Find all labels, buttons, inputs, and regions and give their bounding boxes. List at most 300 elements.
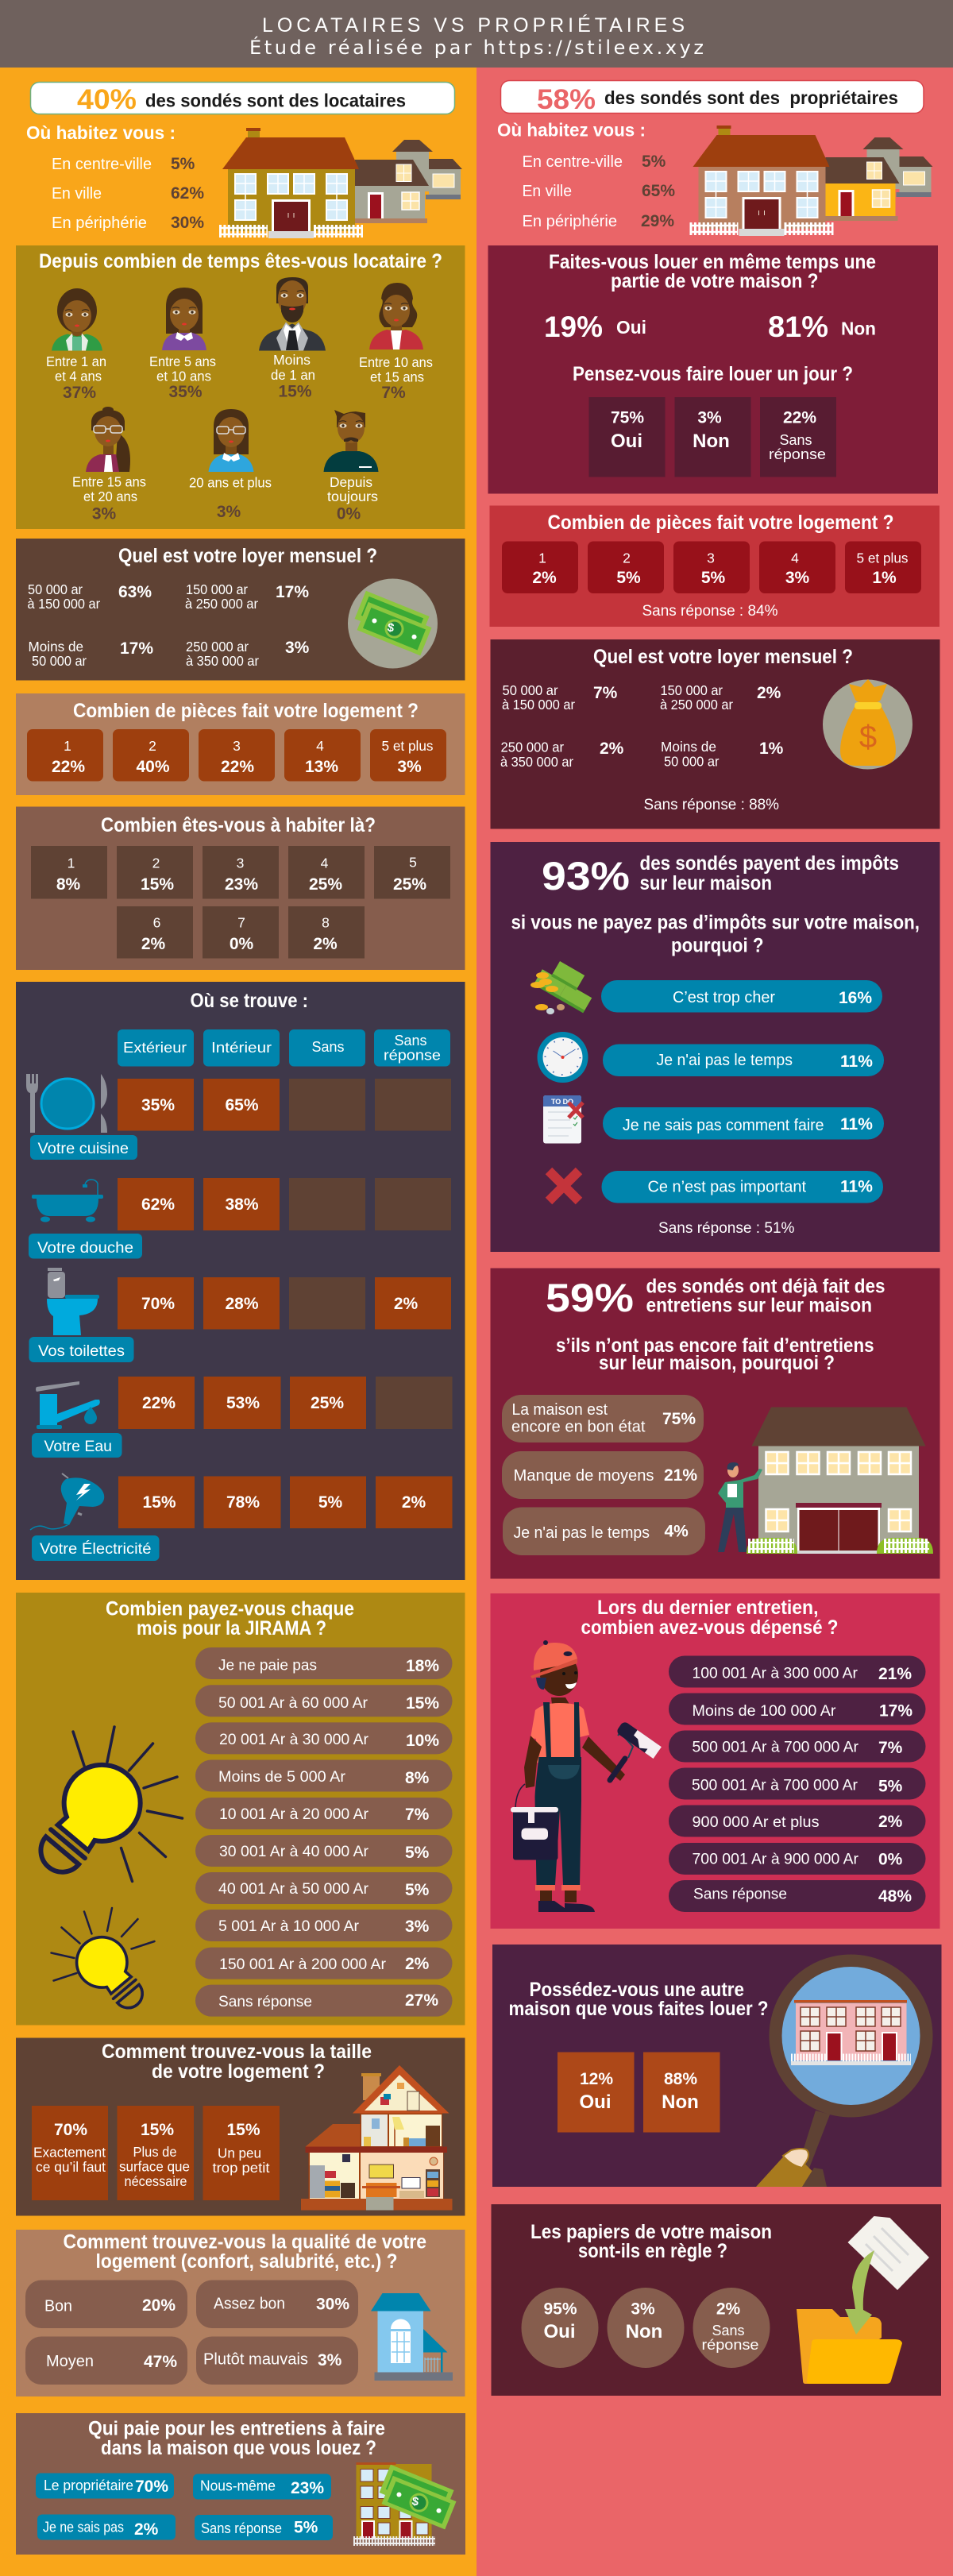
answer pills: 23% bbox=[291, 2479, 324, 2497]
answer boxes bbox=[558, 2053, 720, 2132]
icon: small light bulb bbox=[51, 1908, 156, 2021]
answer boxes: 88% bbox=[664, 2070, 697, 2088]
answer boxes: 15% bbox=[141, 2121, 174, 2139]
person: 10 to 15 years: et 15 ans bbox=[370, 369, 424, 384]
subheading bbox=[556, 1334, 874, 1374]
room boxes: 2 bbox=[149, 738, 156, 754]
subheading: pourquoi ? bbox=[671, 934, 764, 956]
row: shower bbox=[29, 1178, 451, 1258]
panel: last maintenance cost bbox=[491, 1593, 940, 1929]
location stats: En périphérie bbox=[523, 213, 617, 230]
person: 5 to 10 years: 35% bbox=[168, 383, 203, 401]
row: kitchen: 35% bbox=[141, 1096, 175, 1114]
list of amounts: 2% bbox=[878, 1813, 903, 1831]
reasons list: Ce n’est pas important bbox=[648, 1179, 806, 1196]
list of amounts: 10 001 Ar à 20 000 Ar bbox=[219, 1806, 369, 1823]
statistic 59% bbox=[546, 1276, 885, 1320]
icon: toilet bbox=[47, 1268, 99, 1335]
answer boxes bbox=[32, 2106, 280, 2200]
label: electricity: Votre Électricité bbox=[40, 1541, 151, 1558]
location stats: 30% bbox=[171, 214, 204, 232]
panel: who pays for repairs bbox=[16, 2413, 465, 2555]
rent stats: 50 000 ar bbox=[32, 653, 87, 669]
heading bbox=[64, 2230, 426, 2273]
icon: money bag bbox=[823, 679, 912, 769]
heading bbox=[531, 2221, 772, 2262]
location stats: En ville bbox=[52, 185, 102, 203]
room boxes: 5% bbox=[616, 569, 641, 587]
icon: folder with document bbox=[797, 2216, 929, 2384]
household boxes: 4 bbox=[321, 855, 329, 871]
room boxes: 22% bbox=[221, 758, 254, 776]
label: water: Votre Eau bbox=[44, 1439, 112, 1455]
panel: household size bbox=[16, 807, 465, 970]
list of amounts: 48% bbox=[878, 1887, 912, 1906]
answer boxes: 70% bbox=[54, 2121, 87, 2139]
row: toilets: 2% bbox=[394, 1295, 418, 1313]
answer boxes: Oui bbox=[580, 2091, 612, 2113]
answer bubbles: Non bbox=[626, 2321, 662, 2342]
icon: house with surveyor bbox=[718, 1408, 933, 1554]
reasons list: 75% bbox=[662, 1410, 696, 1428]
reasons list: 16% bbox=[839, 989, 872, 1007]
label: toilets: Vos toilettes bbox=[38, 1343, 125, 1360]
answer boxes: 3% bbox=[697, 408, 722, 427]
household boxes: 25% bbox=[393, 875, 426, 894]
label: shower: Votre douche bbox=[37, 1240, 133, 1257]
statistic 59%: 59% bbox=[546, 1276, 634, 1320]
household boxes: 15% bbox=[141, 875, 174, 894]
list of amounts: 15% bbox=[406, 1694, 439, 1713]
reasons list: encore en bon état bbox=[511, 1419, 646, 1436]
rent stats: à 150 000 ar bbox=[27, 596, 100, 612]
reasons list bbox=[502, 1395, 705, 1555]
person: always: toujours bbox=[327, 489, 378, 504]
heading bbox=[106, 1598, 354, 1639]
heading: mois pour la JIRAMA ? bbox=[137, 1617, 326, 1639]
location stats: 62% bbox=[171, 184, 204, 203]
list of amounts: 27% bbox=[405, 1991, 438, 2010]
list of amounts: 5% bbox=[405, 1881, 430, 1899]
reasons list: Manque de moyens bbox=[513, 1467, 654, 1485]
no answer note: Sans réponse : 51% bbox=[658, 1220, 795, 1237]
heading where: Où habitez vous : bbox=[497, 119, 646, 140]
rent stats: 7% bbox=[593, 684, 618, 702]
list of amounts: Je ne paie pas bbox=[218, 1657, 317, 1674]
heading: Les papiers de votre maison bbox=[531, 2221, 772, 2243]
rating pills bbox=[25, 2280, 358, 2385]
row: toilets bbox=[29, 1268, 451, 1362]
location stats: 65% bbox=[642, 182, 675, 200]
person: 15 to 20 years bbox=[72, 407, 146, 523]
yes no stats: Non bbox=[841, 318, 876, 338]
answer boxes bbox=[589, 397, 836, 477]
list of amounts: 7% bbox=[878, 1739, 903, 1757]
room boxes: 5% bbox=[701, 569, 725, 587]
icon: money bag: $ bbox=[859, 720, 877, 755]
person: 1 to 4 years: Entre 1 an bbox=[46, 353, 106, 369]
heading: Lors du dernier entretien, bbox=[597, 1597, 818, 1619]
rating pills: Plutôt mauvais bbox=[203, 2351, 308, 2369]
heading: de votre logement ? bbox=[152, 2060, 325, 2083]
panel: monthly rent (tenants) bbox=[16, 539, 465, 680]
row: kitchen: 65% bbox=[225, 1096, 259, 1114]
person: 10 to 15 years: Entre 10 ans bbox=[359, 354, 433, 370]
row: kitchen bbox=[26, 1074, 451, 1160]
location stats: En centre-ville bbox=[523, 153, 623, 171]
label: toilets bbox=[29, 1337, 133, 1362]
room boxes: 5 et plus bbox=[381, 738, 434, 754]
reasons list: 11% bbox=[840, 1177, 873, 1196]
answer boxes: Sans bbox=[780, 432, 812, 448]
rent stats: 50 000 ar bbox=[502, 682, 558, 698]
icon: clock bbox=[537, 1032, 588, 1083]
list of amounts: 500 001 Ar à 700 000 Ar bbox=[692, 1778, 858, 1794]
person: always: Depuis bbox=[330, 474, 372, 490]
icon: to-do list: TO DO bbox=[551, 1098, 573, 1106]
rent stats: 150 000 ar bbox=[186, 581, 248, 597]
rent stats: 17% bbox=[120, 639, 153, 658]
heading: Comment trouvez-vous la qualité de votre bbox=[64, 2230, 426, 2253]
heading: logement (confort, salubrité, etc.) ? bbox=[95, 2250, 397, 2273]
room boxes: 4 bbox=[791, 550, 799, 566]
statistic 93% bbox=[542, 852, 899, 898]
heading: sont-ils en règle ? bbox=[578, 2240, 727, 2262]
list of amounts: 7% bbox=[405, 1806, 430, 1824]
household boxes: 8% bbox=[56, 875, 80, 894]
heading: partie de votre maison ? bbox=[611, 270, 818, 292]
reasons list: Je ne sais pas comment faire bbox=[623, 1117, 824, 1134]
answer pills bbox=[36, 2474, 333, 2540]
reasons list: C’est trop cher bbox=[673, 989, 775, 1006]
table header: réponse bbox=[384, 1047, 441, 1063]
answer boxes: surface que bbox=[119, 2159, 190, 2175]
row: shower: 38% bbox=[225, 1195, 259, 1214]
row: electricity: 2% bbox=[402, 1493, 426, 1512]
icon: blue house bbox=[371, 2293, 453, 2381]
list of amounts bbox=[195, 1647, 453, 2017]
person: 15 to 20 years: Entre 15 ans bbox=[72, 473, 146, 489]
panel: legal papers bbox=[491, 2204, 941, 2396]
room boxes: 2% bbox=[532, 569, 557, 587]
person: less than 1 year: Moins bbox=[273, 352, 311, 368]
rating pills: 47% bbox=[144, 2353, 177, 2371]
title: LOCATAIRES VS PROPRIÉTAIRES bbox=[262, 14, 685, 37]
statistic 93%: 93% bbox=[542, 854, 630, 898]
list of amounts: 18% bbox=[406, 1657, 439, 1675]
heading where: Où habitez vous : bbox=[26, 122, 176, 143]
room boxes: 4 bbox=[316, 738, 324, 754]
panel: maintenance bbox=[491, 1268, 940, 1579]
room boxes: 1 bbox=[64, 738, 71, 754]
heading: Combien êtes-vous à habiter là? bbox=[101, 814, 376, 836]
icon: painter bbox=[511, 1640, 662, 1912]
person: 1 to 4 years: et 4 ans bbox=[55, 369, 102, 384]
rent stats bbox=[27, 581, 310, 669]
icon: bathtub bbox=[32, 1180, 103, 1222]
rent stats: à 350 000 ar bbox=[186, 653, 259, 669]
subtitle: Étude réalisée par https://stileex.xyz bbox=[249, 36, 704, 59]
person: less than 1 year: de 1 an bbox=[271, 367, 315, 383]
room boxes: 2 bbox=[623, 550, 631, 566]
icon: banknotes bbox=[348, 578, 438, 669]
rent stats: Moins de bbox=[29, 639, 83, 655]
yes no stats: 81% bbox=[768, 311, 828, 343]
list of amounts: 5% bbox=[405, 1844, 430, 1862]
answer boxes: Un peu bbox=[218, 2145, 261, 2161]
answer boxes: trop petit bbox=[213, 2160, 270, 2176]
answer bubbles: Sans bbox=[712, 2323, 745, 2338]
household boxes: 5 bbox=[409, 855, 417, 871]
answer bubbles bbox=[521, 2288, 770, 2368]
person: 1 to 4 years bbox=[46, 288, 106, 402]
list of amounts: 2% bbox=[405, 1955, 430, 1973]
person: less than 1 year: 15% bbox=[278, 383, 312, 400]
answer boxes: 12% bbox=[580, 2070, 613, 2088]
heading: maison que vous faites louer ? bbox=[508, 1998, 769, 2020]
row: electricity: 15% bbox=[142, 1493, 176, 1512]
person: 15 to 20 years: et 20 ans bbox=[83, 489, 137, 504]
heading: Quel est votre loyer mensuel ? bbox=[118, 545, 377, 567]
reasons list: 11% bbox=[840, 1115, 873, 1134]
panel: locataires intro bbox=[26, 83, 462, 238]
reasons list: 4% bbox=[664, 1522, 689, 1541]
no answer note: Sans réponse : 84% bbox=[642, 603, 778, 620]
household boxes: 0% bbox=[230, 935, 253, 953]
household boxes: 25% bbox=[309, 875, 342, 894]
answer boxes: 75% bbox=[611, 408, 644, 427]
answer pills: Nous-même bbox=[200, 2478, 276, 2494]
person: 10 to 15 years bbox=[359, 283, 433, 402]
panel: size of dwelling bbox=[16, 2038, 465, 2216]
heading bbox=[581, 1597, 839, 1639]
rent stats: 17% bbox=[276, 583, 309, 601]
person: 1 to 4 years: 37% bbox=[63, 384, 96, 402]
household boxes: 2% bbox=[141, 935, 165, 953]
answer bubbles: 3% bbox=[631, 2300, 655, 2318]
household boxes: 23% bbox=[225, 875, 258, 894]
heading bbox=[88, 2418, 385, 2459]
table header: Sans bbox=[311, 1039, 345, 1055]
row: shower: 62% bbox=[141, 1195, 175, 1214]
person: always: 0% bbox=[337, 505, 361, 523]
person: 20 years and more bbox=[189, 409, 272, 521]
row: electricity: 78% bbox=[226, 1493, 260, 1512]
panel: JIRAMA bill bbox=[16, 1593, 465, 2026]
answer boxes: réponse bbox=[769, 446, 826, 462]
person: 20 years and more: 20 ans et plus bbox=[189, 475, 272, 491]
panel: owners intro bbox=[497, 81, 932, 236]
background right column bbox=[476, 0, 953, 2576]
icon: houses bbox=[219, 128, 462, 238]
icon: large light bulb bbox=[19, 1727, 183, 1891]
room boxes: 1 bbox=[538, 550, 546, 566]
header bbox=[0, 0, 953, 68]
heading: Comment trouvez-vous la taille bbox=[102, 2041, 372, 2063]
rent stats: à 250 000 ar bbox=[185, 596, 258, 612]
household boxes: 3 bbox=[237, 855, 244, 871]
icon: cutaway house bbox=[301, 2065, 453, 2210]
reasons list: Je n'ai pas le temps bbox=[656, 1052, 793, 1069]
icon: red cross bbox=[549, 1171, 579, 1201]
answer boxes: nécessaire bbox=[124, 2173, 187, 2189]
room boxes: 3 bbox=[707, 550, 715, 566]
location stats: En centre-ville bbox=[52, 156, 152, 173]
location stats: 5% bbox=[642, 153, 666, 171]
panel: rooms (tenants) bbox=[16, 693, 465, 795]
rent stats: Moins de bbox=[661, 739, 716, 755]
list of amounts: 100 001 Ar à 300 000 Ar bbox=[693, 1665, 858, 1682]
icon: hair dryer bbox=[30, 1473, 104, 1530]
person: 10 to 15 years: 7% bbox=[381, 384, 406, 402]
location stats: 29% bbox=[641, 212, 674, 230]
household boxes: 6 bbox=[153, 915, 160, 931]
location stats: 5% bbox=[171, 155, 195, 173]
person: always bbox=[324, 410, 378, 523]
room boxes: 1% bbox=[872, 569, 897, 587]
person: 5 to 10 years: Entre 5 ans bbox=[149, 353, 216, 369]
list of amounts: Sans réponse bbox=[218, 1994, 312, 2010]
yes no stats: 19% bbox=[544, 311, 603, 343]
location stats: En ville bbox=[523, 183, 572, 200]
person: 5 to 10 years bbox=[149, 288, 216, 401]
answer bubbles: réponse bbox=[702, 2337, 759, 2353]
rent stats: 150 000 ar bbox=[661, 682, 723, 698]
household boxes: 2 bbox=[152, 855, 160, 871]
rent stats: 1% bbox=[759, 740, 784, 758]
subheading: s’ils n’ont pas encore fait d’entretiens bbox=[556, 1334, 874, 1357]
location stats: En périphérie bbox=[52, 214, 147, 232]
rating pills: Bon bbox=[44, 2297, 72, 2315]
label: electricity bbox=[32, 1535, 159, 1561]
rent stats: à 350 000 ar bbox=[500, 754, 573, 770]
room boxes: 5 et plus bbox=[856, 550, 909, 566]
rating pills: 30% bbox=[316, 2296, 349, 2313]
icon: magnifying glass over house bbox=[756, 1954, 932, 2187]
list of amounts: 0% bbox=[878, 1851, 903, 1868]
answer pills: 70% bbox=[135, 2478, 168, 2496]
heading: Combien de pièces fait votre logement ? bbox=[548, 512, 894, 534]
rent stats: 250 000 ar bbox=[186, 639, 249, 655]
panel: property taxes bbox=[491, 842, 940, 1252]
answer boxes: ce qu’il faut bbox=[36, 2159, 106, 2175]
yes no stats: Oui bbox=[616, 317, 646, 338]
row: toilets: 70% bbox=[141, 1295, 175, 1313]
rating pills: Assez bon bbox=[214, 2296, 285, 2313]
panel: monthly rent (owners) bbox=[491, 639, 940, 829]
reasons list: Je n'ai pas le temps bbox=[513, 1524, 650, 1542]
subheading: Pensez-vous faire louer un jour ? bbox=[573, 363, 853, 385]
household boxes: 1 bbox=[68, 855, 75, 871]
statistic 59%: des sondés ont déjà fait des bbox=[646, 1276, 885, 1298]
list of amounts: 40 001 Ar à 50 000 Ar bbox=[218, 1881, 369, 1898]
heading: combien avez-vous dépensé ? bbox=[581, 1616, 839, 1639]
heading bbox=[508, 1979, 769, 2020]
reasons list: 21% bbox=[664, 1466, 697, 1485]
list of amounts: 10% bbox=[406, 1732, 439, 1750]
panel: where facilities are located bbox=[16, 982, 465, 1580]
rent stats: 3% bbox=[285, 639, 310, 657]
yes no stats bbox=[544, 311, 876, 343]
label: shower bbox=[29, 1234, 142, 1258]
row: water: 53% bbox=[226, 1394, 260, 1412]
rent stats: 2% bbox=[600, 740, 624, 758]
row: water bbox=[32, 1377, 453, 1458]
statistic 59%: entretiens sur leur maison bbox=[646, 1295, 872, 1317]
household boxes: 8 bbox=[322, 915, 330, 931]
location stats bbox=[523, 153, 675, 230]
statistic 93%: des sondés payent des impôts bbox=[640, 852, 899, 875]
panel: quality of dwelling bbox=[16, 2230, 465, 2396]
rent stats: 2% bbox=[757, 684, 781, 702]
heading: Depuis combien de temps êtes-vous locataire ? bbox=[39, 250, 442, 272]
heading bbox=[549, 251, 876, 292]
answer boxes: Non bbox=[693, 431, 730, 452]
list of amounts: 5% bbox=[878, 1778, 903, 1795]
icon: cash stacks bbox=[531, 956, 600, 1014]
list of amounts: 30 001 Ar à 40 000 Ar bbox=[219, 1844, 369, 1860]
heading: dans la maison que vous louez ? bbox=[101, 2437, 376, 2459]
icon: tap bbox=[36, 1381, 100, 1429]
table header: Intérieur bbox=[211, 1040, 272, 1056]
person: 15 to 20 years: 3% bbox=[92, 505, 116, 523]
table header bbox=[118, 1029, 450, 1066]
list of amounts: 17% bbox=[879, 1701, 912, 1721]
answer pills: Le propriétaire bbox=[44, 2478, 133, 2493]
panel: other house for rent bbox=[492, 1945, 942, 2187]
table header: Sans bbox=[394, 1033, 427, 1049]
heading: Faites-vous louer en même temps une bbox=[549, 251, 876, 273]
row: water: 22% bbox=[142, 1394, 176, 1412]
person: less than 1 year bbox=[259, 277, 326, 400]
heading: Où se trouve : bbox=[191, 990, 308, 1012]
answer boxes: Plus de bbox=[133, 2144, 176, 2160]
label: water bbox=[32, 1433, 122, 1458]
reasons list: La maison est bbox=[511, 1401, 608, 1419]
list of amounts bbox=[669, 1655, 926, 1912]
person: 20 years and more: 3% bbox=[217, 503, 241, 521]
answer boxes: Non bbox=[662, 2091, 699, 2113]
household boxes: 7 bbox=[237, 915, 245, 931]
label: kitchen: Votre cuisine bbox=[38, 1141, 129, 1157]
list of amounts: 20 001 Ar à 30 000 Ar bbox=[219, 1732, 369, 1748]
answer bubbles: 2% bbox=[716, 2300, 740, 2318]
rating pills: 3% bbox=[318, 2351, 342, 2369]
label: kitchen bbox=[30, 1135, 137, 1160]
rating pills: Moyen bbox=[46, 2353, 94, 2370]
panel: rooms (owners) bbox=[489, 505, 939, 627]
room boxes: 3% bbox=[785, 569, 809, 587]
row: toilets: 28% bbox=[225, 1295, 259, 1313]
answer boxes: Oui bbox=[611, 431, 642, 452]
list of amounts: Moins de 5 000 Ar bbox=[218, 1769, 346, 1786]
list of amounts: Moins de 100 000 Ar bbox=[693, 1703, 836, 1720]
banner 40%: 40% bbox=[77, 84, 137, 115]
panel: duration as tenant bbox=[16, 245, 465, 529]
panel: renting a part of the house bbox=[488, 245, 938, 494]
list of amounts: 900 000 Ar et plus bbox=[693, 1814, 820, 1831]
room boxes: 13% bbox=[305, 758, 338, 776]
answer boxes: Exactement bbox=[33, 2145, 106, 2161]
household boxes: 2% bbox=[313, 935, 338, 953]
row: electricity bbox=[30, 1473, 453, 1561]
answer boxes: 15% bbox=[226, 2121, 260, 2139]
reasons list bbox=[601, 980, 884, 1203]
answer pills: 5% bbox=[294, 2518, 318, 2537]
list of amounts: Sans réponse bbox=[693, 1886, 787, 1903]
banner 58%: 58% bbox=[537, 84, 596, 115]
heading: Qui paie pour les entretiens à faire bbox=[88, 2418, 385, 2440]
